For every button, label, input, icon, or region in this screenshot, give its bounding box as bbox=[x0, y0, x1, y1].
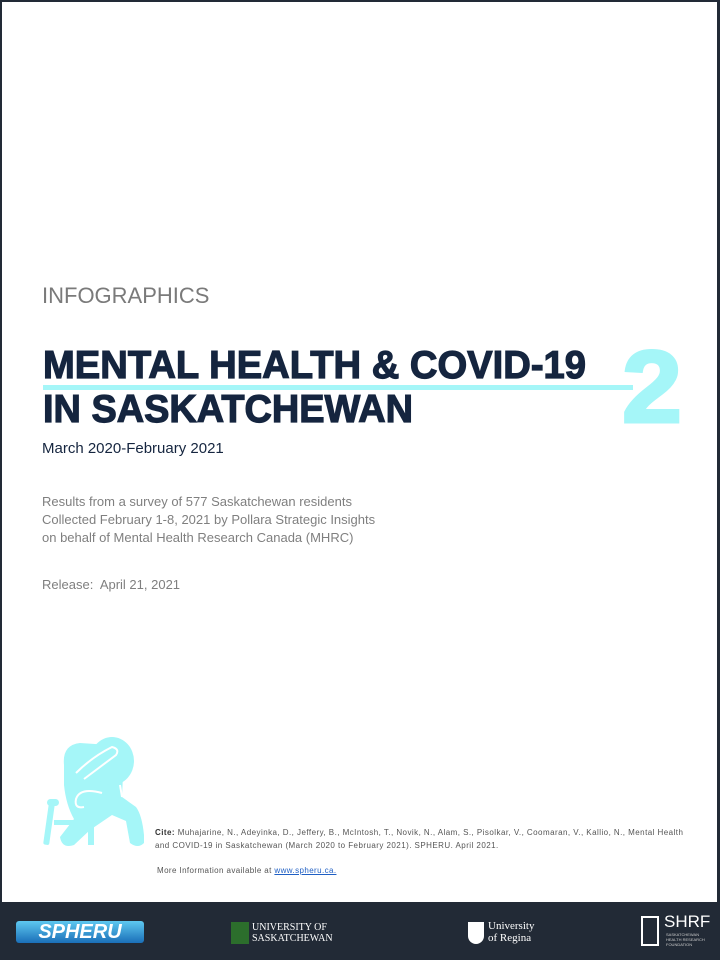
footer logos: HEALTH RESEARCH bbox=[666, 937, 705, 942]
logo: SPHERU bbox=[16, 921, 144, 943]
date range: March 2020-February 2021 bbox=[42, 440, 224, 457]
citation: Cite: Muhajarine, N., Adeyinka, D., Jeffery, B., McIntosh, T., Novik, N., Alam, S., Pisolkar, V., Coomaran, V., Kallio, N., Mental Health bbox=[155, 828, 683, 837]
torso bbox=[60, 743, 144, 846]
head bbox=[90, 737, 134, 785]
footer logos: University bbox=[488, 920, 534, 932]
footer logos: FOUNDATION bbox=[666, 942, 692, 947]
footer logos: SASKATCHEWAN bbox=[252, 933, 333, 944]
footer logos: of Regina bbox=[488, 932, 531, 944]
logo: SHRF bbox=[641, 916, 659, 946]
chair bbox=[54, 820, 76, 825]
footer logos bbox=[16, 912, 710, 947]
cyan underline bbox=[43, 385, 633, 390]
footer logos: SASKATCHEWAN bbox=[666, 932, 699, 937]
citation: and COVID-19 in Saskatchewan (March 2020 to February 2021). SPHERU. April 2021. bbox=[155, 841, 499, 850]
survey description: Results from a survey of 577 Saskatchewan residents bbox=[42, 494, 352, 509]
logo: University of Regina bbox=[468, 922, 484, 944]
cane bbox=[43, 803, 55, 845]
logo: University of Saskatchewan bbox=[231, 922, 249, 944]
logo: SPHERU: SPHERU bbox=[38, 921, 122, 943]
icon: distressed person on chair bbox=[43, 737, 144, 846]
release date: Release: April 21, 2021 bbox=[42, 577, 180, 592]
footer logos: UNIVERSITY OF bbox=[252, 922, 327, 933]
more info: More Information available at www.spheru.ca. bbox=[157, 866, 336, 875]
title line 1: MENTAL HEALTH & COVID-19 bbox=[43, 344, 586, 387]
survey description: Collected February 1-8, 2021 by Pollara Strategic Insights bbox=[42, 512, 375, 527]
footer logos: SHRF bbox=[664, 912, 710, 931]
survey description: on behalf of Mental Health Research Canada (MHRC) bbox=[42, 530, 353, 545]
title block bbox=[43, 330, 682, 440]
survey description bbox=[42, 494, 375, 545]
label: infographics: INFOGRAPHICS bbox=[42, 283, 209, 308]
citation bbox=[155, 828, 683, 850]
title line 2: IN SASKATCHEWAN bbox=[43, 388, 413, 431]
